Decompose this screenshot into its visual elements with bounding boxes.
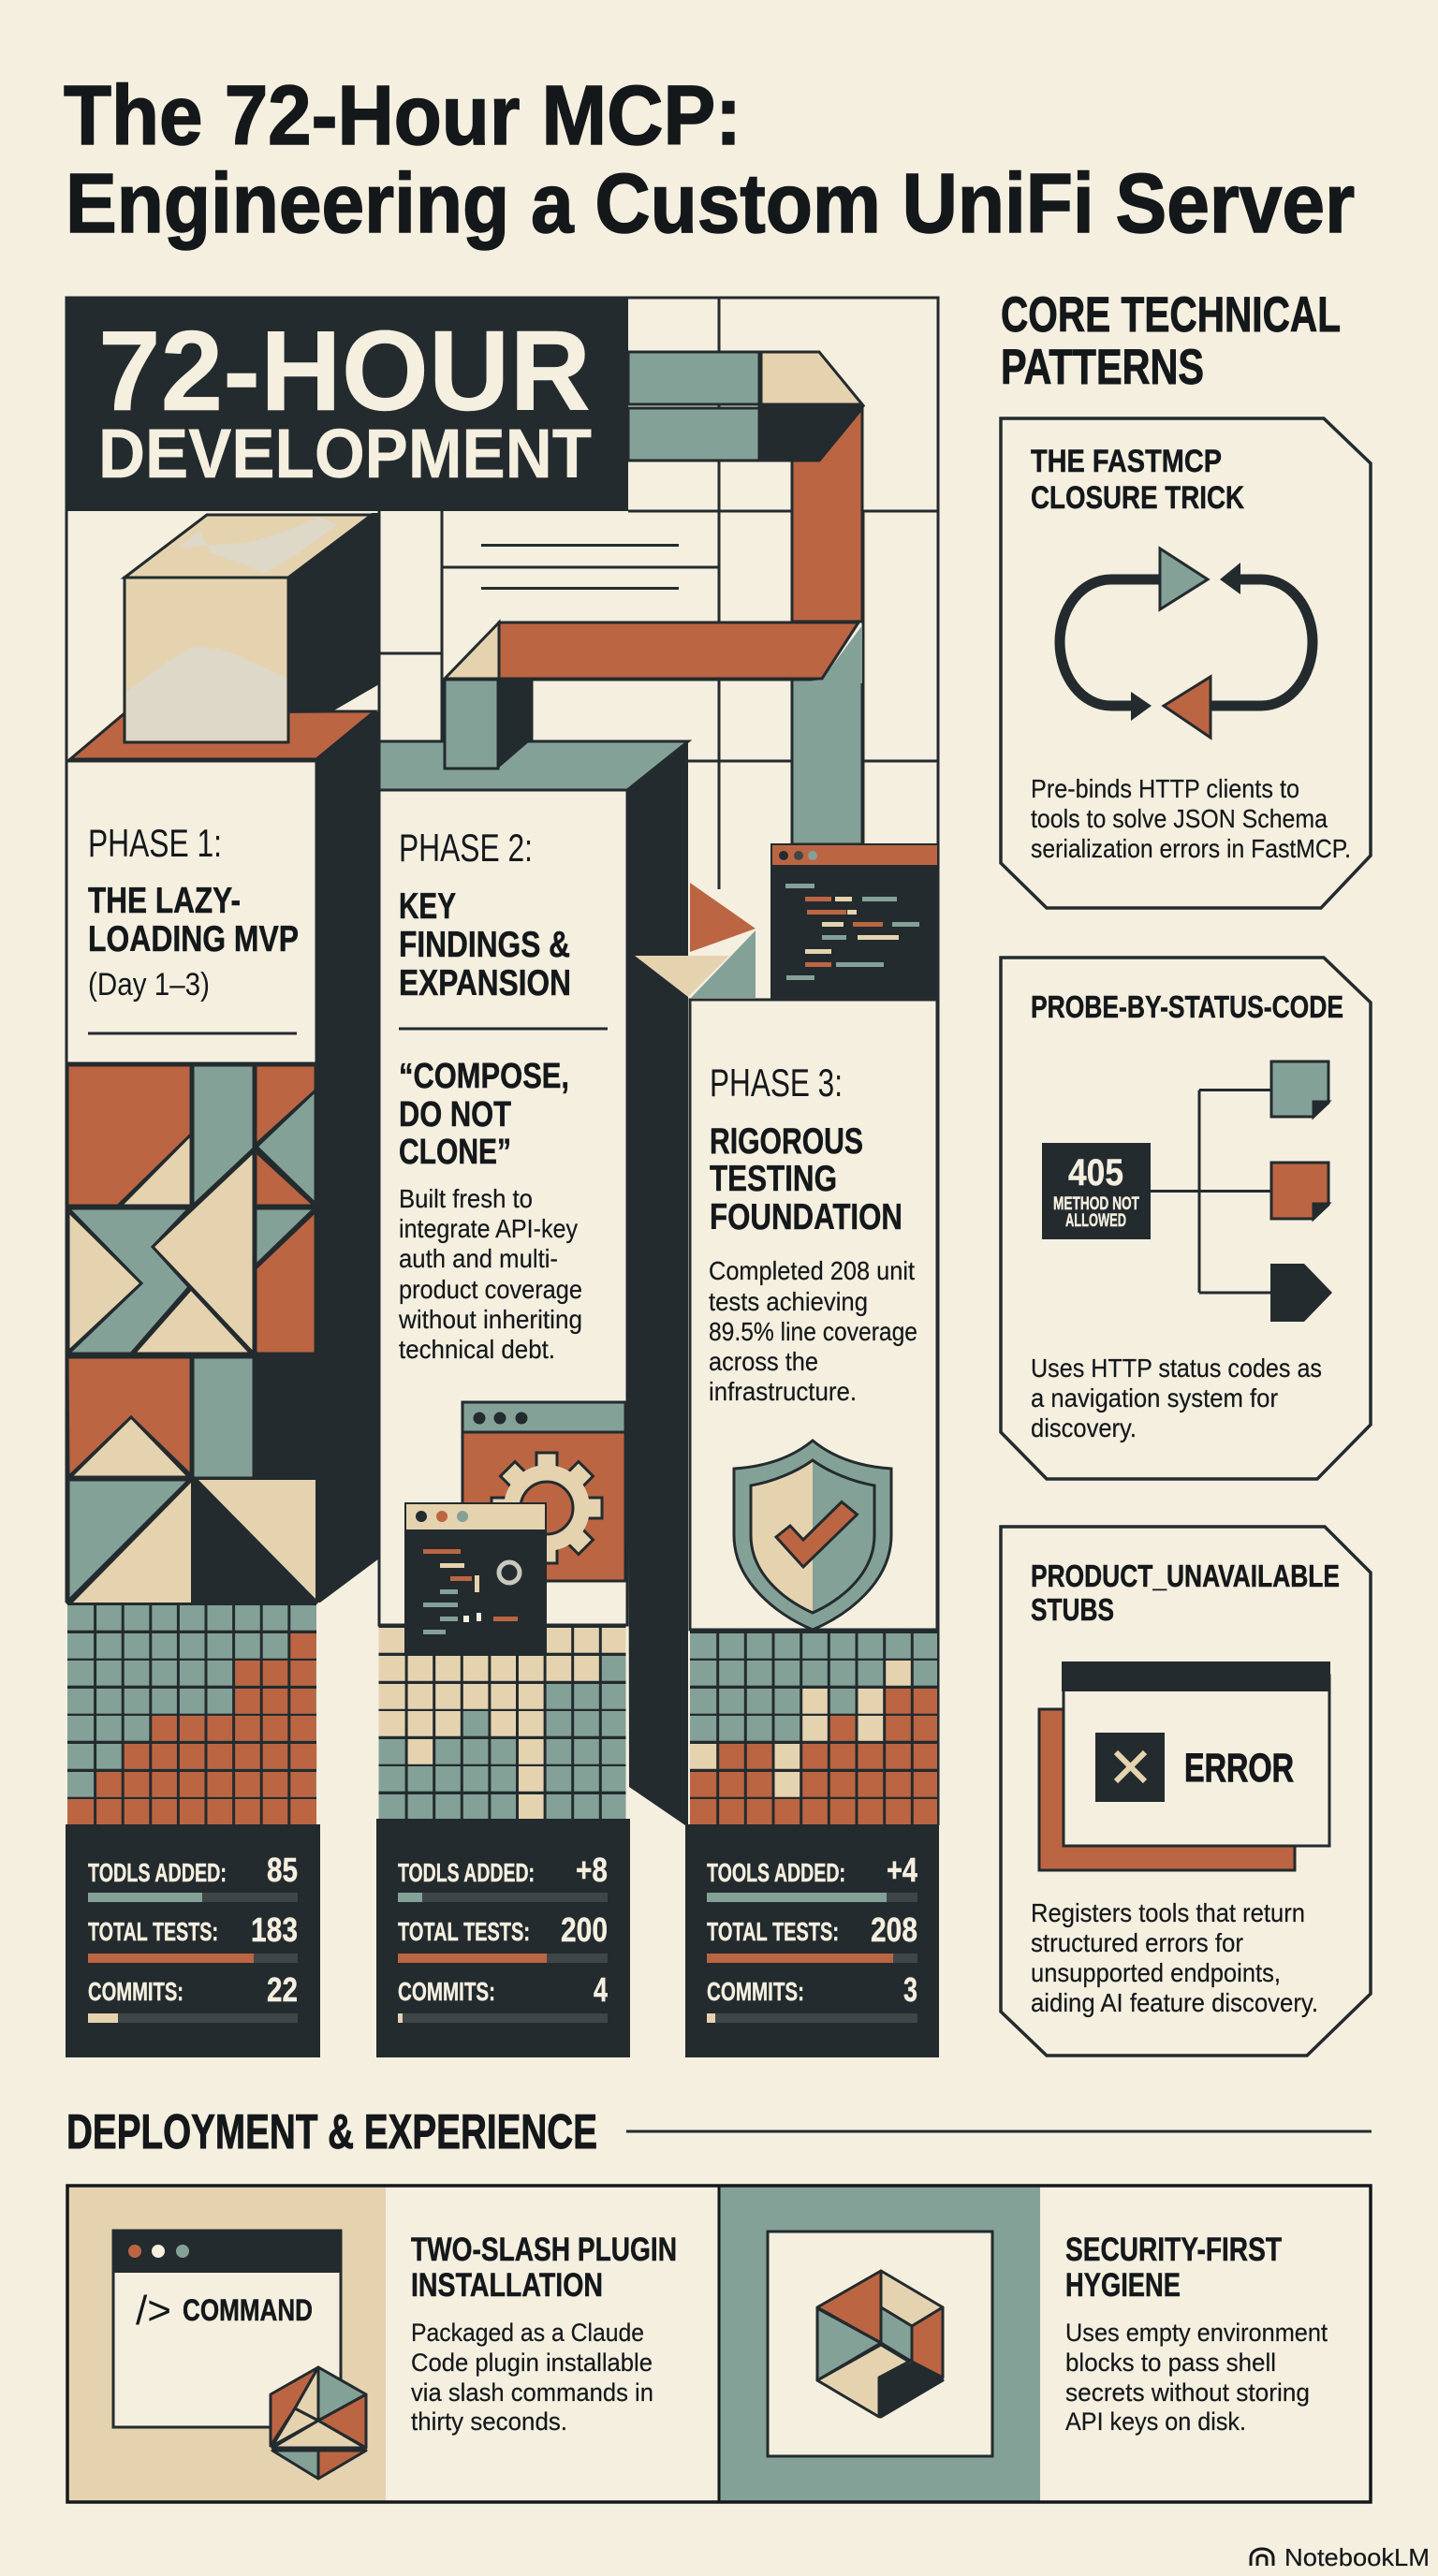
title	[64, 69, 1355, 251]
panel: phase 1: LOADING MVP	[88, 919, 299, 959]
panel: deployment cards: Uses empty environment	[1065, 2319, 1328, 2347]
panel: deployment cards: API keys on disk.	[1065, 2408, 1246, 2436]
panel: phase 2: EXPANSION	[399, 963, 571, 1003]
panel: phase 3: Completed 208 unit	[709, 1256, 915, 1285]
icon: command window: COMMAND	[183, 2293, 313, 2327]
panel: phase 3: across the	[709, 1347, 818, 1376]
panel: fastmcp closure trick: Pre-binds HTTP clients to	[1031, 774, 1299, 803]
panel: phase 2: integrate API-key	[399, 1214, 578, 1243]
stats: phase 1: COMMITS:	[88, 1977, 183, 2006]
decorative triangles	[635, 883, 756, 998]
stats: phase 3: 208	[871, 1910, 917, 1949]
diagram: status code branches	[1042, 1061, 1332, 1322]
panel: fastmcp closure trick: CLOSURE TRICK	[1031, 480, 1244, 516]
panel: phase 2: FINDINGS &	[399, 925, 570, 965]
icon: terminal window	[770, 843, 937, 1000]
icon: closure loop	[1060, 549, 1313, 738]
geometric mosaic: phase 1	[67, 1063, 316, 1603]
panel: probe by status code: a navigation system for	[1031, 1383, 1278, 1412]
panel: probe by status code: Uses HTTP status codes as	[1031, 1354, 1322, 1383]
stats: phase 1: 183	[251, 1910, 298, 1949]
panel: product unavailable stubs: unsupported endpoints,	[1031, 1958, 1281, 1987]
stats: phase 3: 3	[903, 1970, 917, 2009]
panel: phase 2: without inheriting	[398, 1305, 582, 1334]
panel: phase 2: Built fresh to	[399, 1184, 533, 1213]
icon: error window: ERROR	[1184, 1746, 1294, 1791]
heading: deployment and experience: DEPLOYMENT & EXPERIENCE	[66, 2105, 597, 2159]
panel: phase 3	[690, 1000, 937, 1630]
stats: phase 2: 4	[594, 1970, 608, 2009]
panel: phase 2: DO NOT	[399, 1095, 511, 1134]
stats: phase 1: TOTAL TESTS:	[88, 1917, 218, 1946]
title: The 72-Hour MCP:	[64, 69, 741, 163]
icon: command window	[113, 2231, 341, 2427]
icon: security hexagon	[768, 2232, 992, 2456]
stats: phase 3: TOOLS ADDED:	[707, 1858, 845, 1887]
panel: product unavailable stubs: PRODUCT_UNAVAILABLE	[1031, 1559, 1340, 1593]
panel: phase 3: TESTING	[710, 1159, 837, 1199]
panel: phase 2: KEY	[399, 886, 456, 927]
pipeline illustration	[445, 352, 862, 844]
stats: phase 2	[376, 1819, 630, 2057]
panel: deployment cards: HYGIENE	[1065, 2267, 1181, 2304]
panel: phase 3: 89.5% line coverage	[709, 1317, 917, 1346]
icon: gear window	[462, 1402, 625, 1581]
stats: phase 2: TODLS ADDED:	[398, 1858, 535, 1887]
stats: phase 2: 200	[561, 1910, 608, 1949]
dark side walls	[316, 680, 688, 1825]
panel: product unavailable stubs	[1001, 1527, 1371, 2056]
stats: phase 3: TOTAL TESTS:	[707, 1917, 839, 1946]
panel: fastmcp closure trick: THE FASTMCP	[1031, 444, 1222, 479]
stats: phase 1: 22	[267, 1970, 298, 2009]
tile grid: phase 2	[378, 1626, 625, 1824]
panel: product unavailable stubs: aiding AI feature discovery.	[1031, 1988, 1318, 2017]
panel: deployment cards: SECURITY-FIRST	[1065, 2232, 1282, 2268]
heading: 72-hour development	[66, 297, 628, 511]
stats: phase 1: 85	[267, 1851, 298, 1889]
panel: fastmcp closure trick: tools to solve JSON Schema	[1031, 804, 1328, 833]
tile grid: phase 3	[690, 1630, 937, 1825]
diagram: status code branches: 405	[1068, 1152, 1123, 1193]
stats: phase 2: +8	[576, 1851, 608, 1889]
icon: error window	[1039, 1661, 1330, 1870]
stats: phase 2: COMMITS:	[398, 1977, 495, 2006]
diagram: status code branches: ALLOWED	[1065, 1211, 1126, 1231]
panel: phase 2: “COMPOSE,	[399, 1057, 569, 1096]
heading: 72-hour development: DEVELOPMENT	[98, 415, 592, 492]
panel: phase 2: product coverage	[399, 1275, 582, 1304]
stats: phase 1	[66, 1824, 320, 2057]
panel: phase 2: auth and multi-	[399, 1244, 558, 1273]
stats: phase 3	[685, 1824, 939, 2057]
panel: deployment cards: thirty seconds.	[411, 2408, 567, 2436]
tile grid: phase 1	[67, 1603, 316, 1825]
stats: phase 3: +4	[887, 1851, 917, 1889]
logo: notebooklm: NotebookLM	[1284, 2543, 1430, 2571]
heading: 72-hour development: 72-HOUR	[98, 307, 591, 434]
panel: phase 3: FOUNDATION	[710, 1197, 902, 1237]
decorative document lines	[481, 545, 679, 588]
panel: probe by status code	[1001, 958, 1371, 1479]
heading: core technical patterns: CORE TECHNICAL	[1001, 287, 1341, 343]
icon: small hexagon	[271, 2367, 366, 2479]
title: Engineering a Custom UniFi Server	[66, 157, 1355, 251]
panel: deployment cards: Code plugin installable	[411, 2349, 653, 2377]
heading: core technical patterns	[1001, 287, 1341, 395]
panel: deployment cards: via slash commands in	[411, 2378, 653, 2407]
icon: code window	[404, 1502, 547, 1653]
panel: deployment cards: INSTALLATION	[411, 2267, 603, 2304]
panel: deployment cards: blocks to pass shell	[1065, 2349, 1276, 2377]
panel: phase 3: PHASE 3:	[710, 1061, 843, 1105]
panel: fastmcp closure trick	[1001, 418, 1371, 908]
panel: phase 3: tests achieving	[709, 1287, 868, 1316]
panel: product unavailable stubs: STUBS	[1031, 1592, 1114, 1627]
panel: phase 1	[66, 761, 316, 1063]
panel: probe by status code: PROBE-BY-STATUS-CODE	[1031, 989, 1343, 1024]
stats: phase 1: TODLS ADDED:	[88, 1858, 227, 1887]
stats: phase 2: TOTAL TESTS:	[398, 1917, 530, 1946]
icon: cube on platform	[70, 513, 379, 759]
panel: phase 1: THE LAZY-	[88, 881, 241, 921]
panel: product unavailable stubs: structured errors for	[1031, 1928, 1243, 1957]
icon: command window: />	[136, 2288, 171, 2334]
panel: phase 2	[379, 790, 627, 1625]
panel: phase 2: CLONE”	[399, 1133, 511, 1172]
heading: core technical patterns: PATTERNS	[1001, 340, 1204, 395]
panel: probe by status code: discovery.	[1031, 1413, 1137, 1442]
stats: phase 3: COMMITS:	[707, 1977, 804, 2006]
panel: phase 3: infrastructure.	[709, 1377, 857, 1406]
panel: deployment cards	[67, 2186, 1371, 2502]
panel: deployment cards: secrets without storing	[1065, 2378, 1310, 2407]
icon: shield	[734, 1441, 891, 1630]
panel: deployment cards: Packaged as a Claude	[411, 2319, 644, 2347]
panel: fastmcp closure trick: serialization errors in FastMCP.	[1031, 834, 1351, 863]
panel: product unavailable stubs: Registers tools that return	[1031, 1898, 1305, 1927]
panel: deployment cards: TWO-SLASH PLUGIN	[411, 2232, 677, 2268]
panel: phase 2: technical debt.	[399, 1335, 555, 1364]
panel: phase 2: PHASE 2:	[399, 826, 533, 870]
diagram: status code branches: METHOD NOT	[1053, 1194, 1139, 1214]
panel: phase 1: (Day 1–3)	[88, 967, 210, 1003]
panel: phase 3: RIGOROUS	[710, 1121, 863, 1162]
panel: phase 1: PHASE 1:	[88, 821, 222, 865]
